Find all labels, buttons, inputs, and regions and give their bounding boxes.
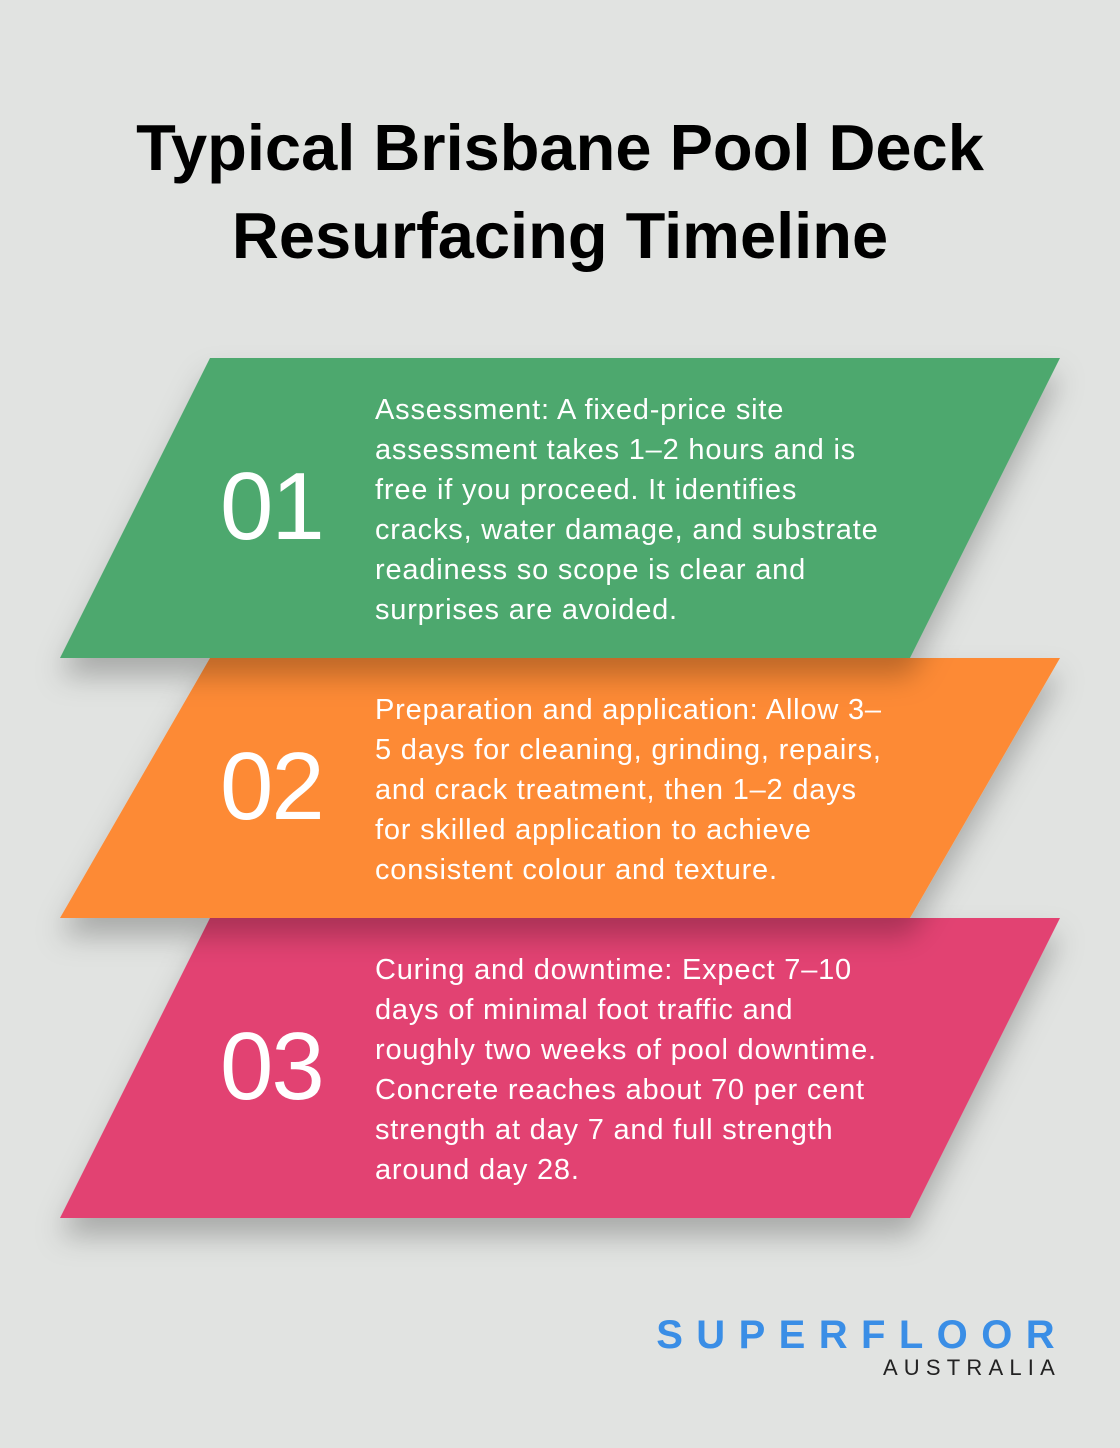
step 1 text [375,394,879,626]
title: Resurfacing Timeline [232,199,888,272]
step 2 number: 02 [220,733,323,840]
step 1 text: assessment takes 1–2 hours and is [375,434,856,466]
logo [656,1313,1068,1380]
step 2 text: 5 days for cleaning, grinding, repairs, [375,734,882,766]
step 3 text: around day 28. [375,1154,580,1186]
step 3 text: Concrete reaches about 70 per cent [375,1074,865,1106]
panel 3 [60,918,1060,1218]
step 1 text: readiness so scope is clear and [375,554,806,586]
step 2 text: Preparation and application: Allow 3– [375,694,882,726]
title: Typical Brisbane Pool Deck [136,111,984,184]
step 3 number: 03 [220,1013,323,1120]
step 2 text [375,694,882,886]
title [136,111,984,272]
step 1 text: free if you proceed. It identifies [375,474,797,506]
step 3 text: days of minimal foot traffic and [375,994,793,1026]
step 3 text: roughly two weeks of pool downtime. [375,1034,877,1066]
logo: AUSTRALIA [883,1355,1061,1380]
step 1 text: Assessment: A fixed-price site [375,394,784,426]
step 2 text: and crack treatment, then 1–2 days [375,774,857,806]
logo: SUPERFLOOR [656,1313,1068,1357]
step 3 text: Curing and downtime: Expect 7–10 [375,954,852,986]
panel 1 [60,358,1060,658]
step 2 text: consistent colour and texture. [375,854,778,886]
step 2 text: for skilled application to achieve [375,814,812,846]
step 3 text: strength at day 7 and full strength [375,1114,833,1146]
step 1 number: 01 [220,453,323,560]
step 1 text: cracks, water damage, and substrate [375,514,879,546]
step 3 text [375,954,877,1186]
panel 2 [60,658,1060,918]
step 1 text: surprises are avoided. [375,594,678,626]
